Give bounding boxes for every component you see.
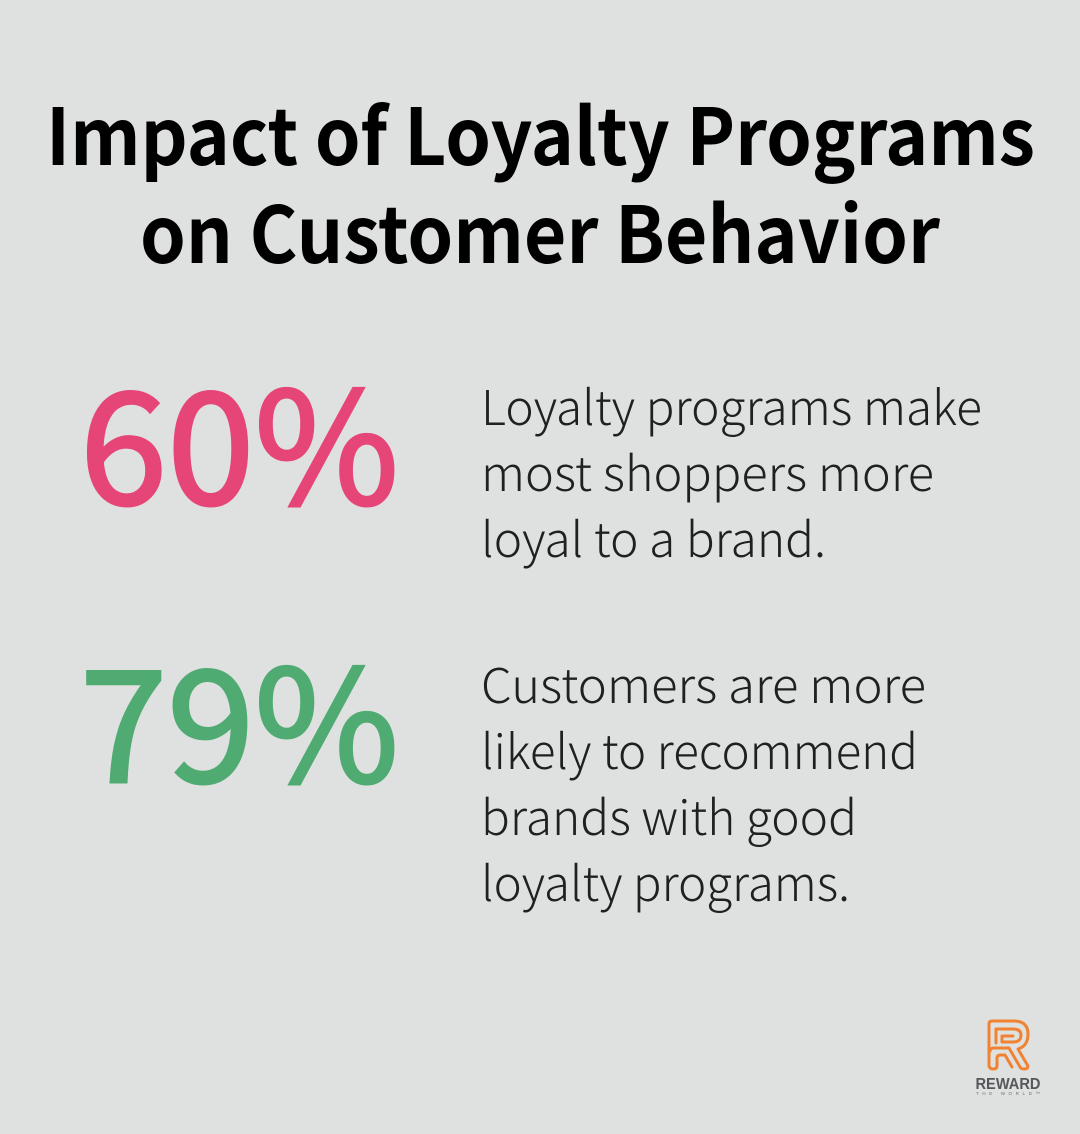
stat description: recommendations: [481, 647, 926, 915]
icon: orange R mark: [989, 1021, 1028, 1069]
stat number: 79%: 79%: [80, 602, 399, 827]
stat description: recommendations: likely to recommend: [481, 713, 918, 783]
stat description: loyalty: Loyalty programs make: [481, 369, 982, 439]
title: Impact of Loyalty Programs: [46, 76, 1035, 188]
stat description: recommendations: loyalty programs.: [481, 845, 850, 915]
logo wordmark: REWARD: [976, 1076, 1040, 1093]
panel: 79% statistic: [80, 602, 926, 915]
stat description: recommendations: Customers are more: [481, 647, 926, 717]
title: [46, 76, 1035, 286]
panel: 60% statistic: [80, 324, 982, 571]
stat description: loyalty: most shoppers more: [481, 435, 934, 505]
logo tagline: THE WORLD™: [976, 1091, 1040, 1096]
title: on Customer Behavior: [140, 174, 941, 286]
stat number: 60%: 60%: [80, 324, 399, 549]
stat description: recommendations: brands with good: [481, 779, 857, 849]
stat description: loyalty: [481, 369, 982, 571]
stat description: loyalty: loyal to a brand.: [481, 501, 826, 571]
logo: Reward the World: [976, 1021, 1040, 1096]
